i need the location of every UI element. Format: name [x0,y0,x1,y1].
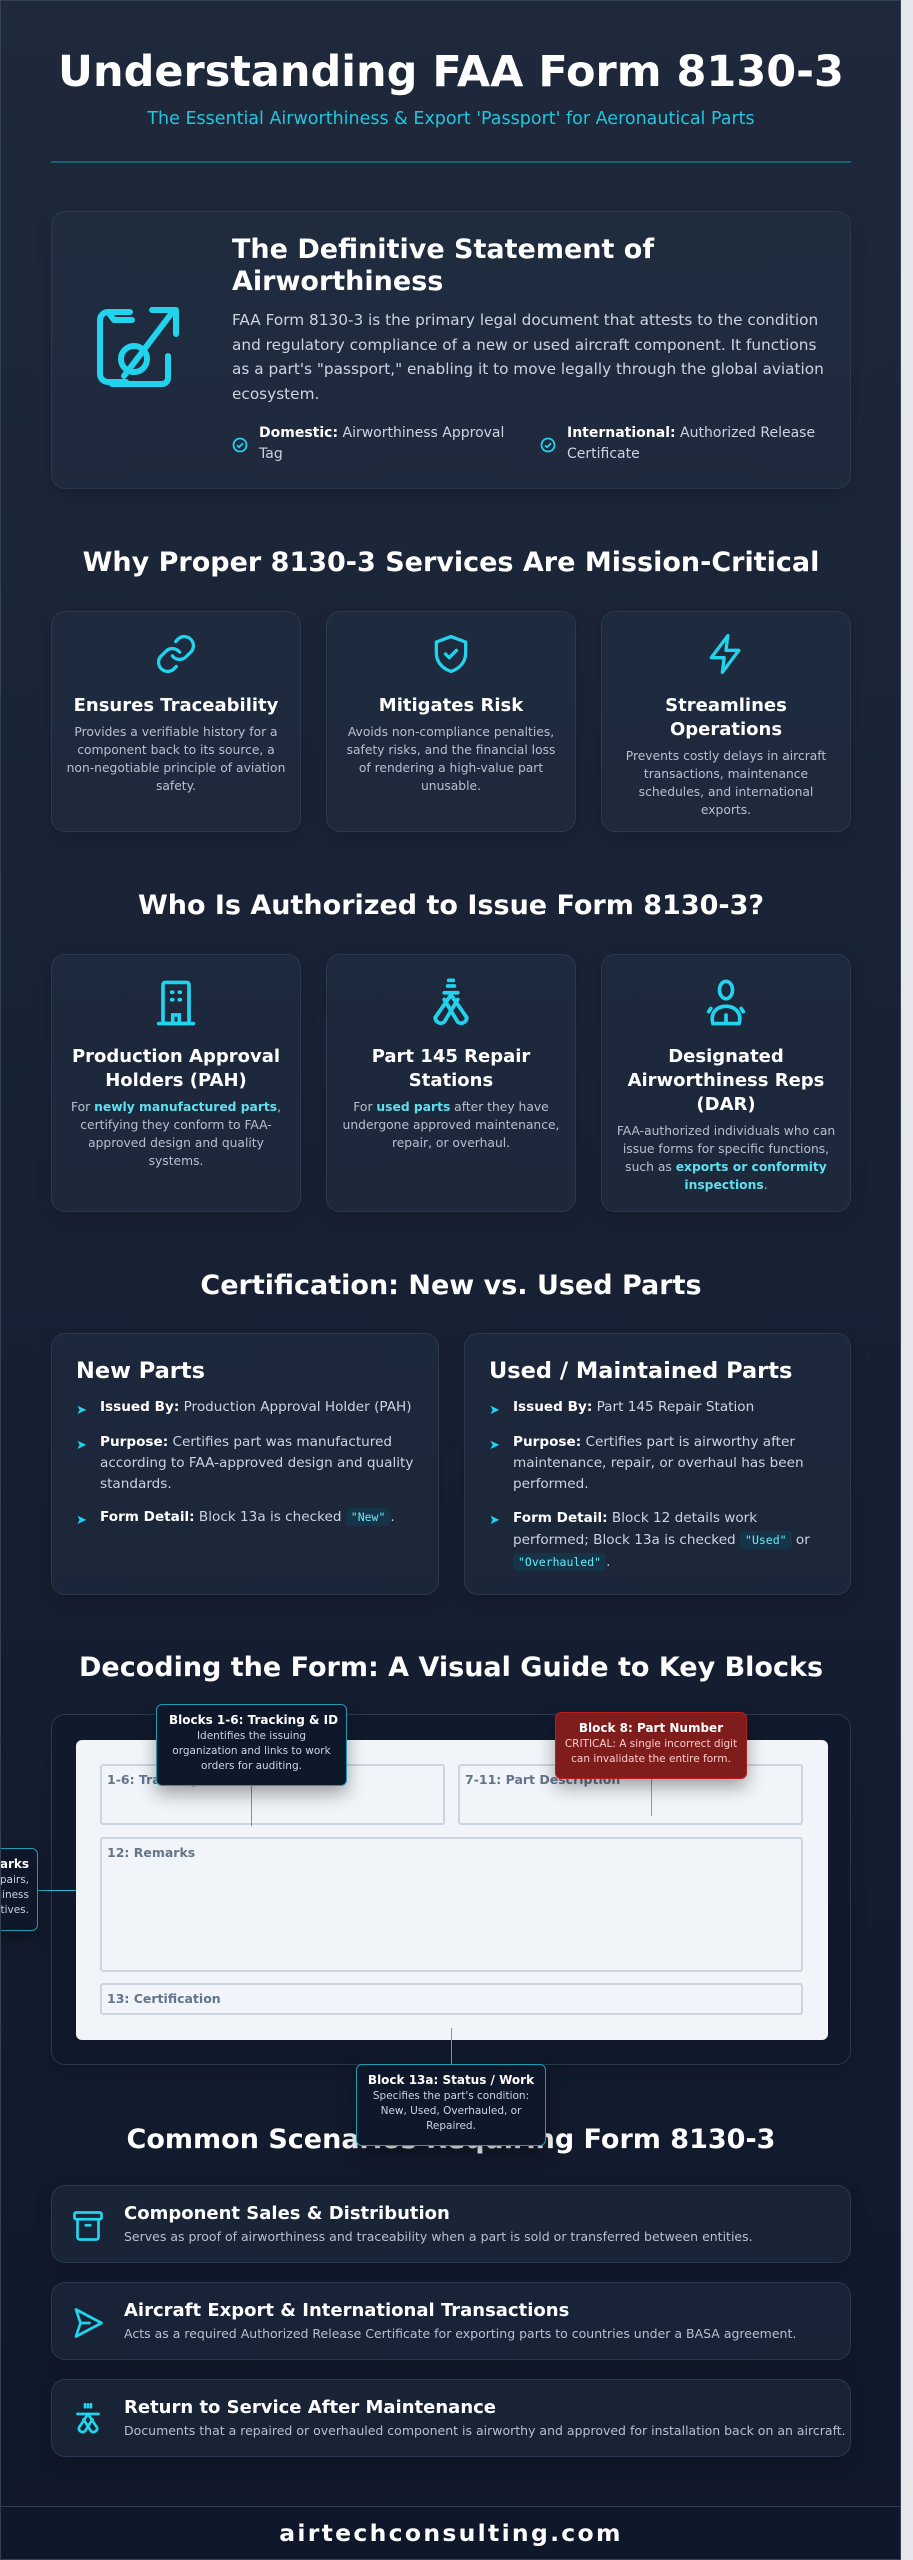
panel: scenario return to service: Return to Service After Maintenance [124,2397,496,2418]
panel: new parts [51,1333,439,1595]
heading: scenarios: Common Scenarios Requiring Form 8130-3 [127,2124,775,2155]
callout: block 8: CRITICAL: A single incorrect digit can invalidate the entire form. [565,1738,737,1765]
panel: used parts: Used / Maintained Parts [489,1358,792,1384]
panel: DAR [601,954,851,1212]
footer [1,2506,901,2560]
panel: used parts [464,1333,851,1595]
panel: operations: Prevents costly delays in aircraft transactions, maintenance schedules, and international exports. [626,749,826,817]
panel: risk: Mitigates Risk [379,695,523,716]
subtitle: The Essential Airworthiness & Export 'Passport' for Aeronautical Parts [147,109,755,129]
callout: block 13a: Block 13a: Status / Work [368,2073,534,2087]
panel: definitive statement [51,211,851,489]
panel: operations: Operations [670,719,782,740]
bullet: issued: Issued By: Production Approval Holder (PAH) [100,1399,412,1415]
icon: person [706,980,746,1026]
panel: traceability [51,611,301,832]
bullet: purpose: ➤ [489,1438,500,1453]
panel: operations [601,611,851,832]
icon: tools [433,978,469,1026]
panel: scenario export [51,2282,851,2360]
icon: bolt [710,634,741,674]
callout: block 8: Block 8: Part Number [579,1721,723,1735]
heading: decoding: Decoding the Form: A Visual Guide to Key Blocks [79,1652,823,1683]
form sheet: 1-6: Tracking [107,1772,199,1787]
icon: box [73,2211,103,2241]
panel: operations: Streamlines [665,695,787,716]
bullet: form detail: ➤ [489,1513,500,1528]
bullet: purpose: ➤ [76,1438,87,1453]
callout: block 12 remarks [0,1848,38,1931]
heading: why: Why Proper 8130-3 Services Are Mission-Critical [83,547,819,578]
callout: blocks 1-6: Blocks 1-6: Tracking & ID [169,1713,338,1727]
panel: part 145: Part 145 Repair Stations [372,1046,530,1091]
heading: The Definitive Statement of Airworthiness [232,234,654,297]
panel: scenario sales [51,2185,851,2263]
panel: PAH: Production Approval Holders (PAH) [72,1046,280,1091]
panel: DAR: FAA-authorized individuals who can issue forms for specific functions, such as exports or conformity inspections. [617,1124,835,1192]
footer: airtechconsulting.com [279,2519,623,2547]
callout: blocks 1-6: Identifies the issuing organization and links to work orders for auditing. [172,1730,331,1772]
form sheet: 12: Remarks [107,1845,195,1860]
bullet: form detail: ➤ [76,1513,87,1528]
form sheet: 7-11: Part Description [465,1772,620,1787]
panel: risk [326,611,576,832]
bullet: purpose: Purpose: Certifies part is airworthy after maintenance, repair, or overhaul has been performed. [513,1434,804,1492]
bullet: domestic: Domestic: Airworthiness Approval Tag [259,425,504,462]
panel: scenario sales: Component Sales & Distribution [124,2203,450,2224]
icon: shield [434,634,468,674]
bullet: purpose: Purpose: Certifies part was manufactured according to FAA-approved design and quality standards. [100,1434,413,1492]
panel: risk: Avoids non-compliance penalties, safety risks, and the financial loss of rendering a high-value part unusable. [347,725,555,793]
panel: scenario export: Aircraft Export & International Transactions [124,2300,569,2321]
bullet: international: International: Authorized Release Certificate [567,425,815,462]
title: Understanding FAA Form 8130-3 [58,47,844,97]
panel: DAR: Designated Airworthiness Reps (DAR) [628,1046,824,1115]
heading: who: Who Is Authorized to Issue Form 8130-3? [138,890,764,921]
panel: part 145: For used parts after they have undergone approved maintenance, repair, or overhaul. [343,1100,559,1150]
callout: blocks 1-6 [156,1704,347,1786]
form sheet [76,1740,828,2040]
form sheet: 13: Certification [107,1991,221,2006]
bullet: issued: ➤ [489,1403,500,1418]
panel: scenario return to service: Documents that a repaired or overhauled component is airworthy and approved for installation back on an aircraft. [124,2423,846,2438]
panel: scenario export: Acts as a required Authorized Release Certificate for exporting parts to countries under a BASA agreement. [124,2326,796,2341]
panel: scenario return to service [51,2379,851,2457]
icon: send [74,2308,103,2338]
bullet: issued: Issued By: Part 145 Repair Station [513,1399,754,1415]
panel: traceability: Provides a verifiable history for a component back to its source, a non-negotiable principle of aviation safety. [67,725,285,793]
bullet: form detail: Form Detail: Block 13a is checked "New" . [100,1509,395,1525]
callout: block 13a: Specifies the part's condition: New, Used, Overhauled, or Repaired. [373,2090,529,2132]
panel: PAH [51,954,301,1212]
callout: block 13a [356,2064,546,2146]
icon: folder with arrow [97,307,179,387]
bullet: issued: ➤ [76,1403,87,1418]
callout: block 8 [555,1712,747,1779]
icon: building [156,980,196,1026]
panel: part 145 [326,954,576,1212]
panel: new parts: New Parts [76,1358,205,1384]
panel: PAH: For newly manufactured parts, certifying they conform to FAA-approved design and quality systems. [71,1100,281,1168]
heading: certification: Certification: New vs. Used Parts [200,1270,702,1301]
icon: tools [76,2402,100,2434]
panel: traceability: Ensures Traceability [74,695,278,716]
paragraph: FAA Form 8130-3 is the primary legal document that attests to the condition and regulatory compliance of a new or used aircraft component. It functions as a part's "passport," enabling it to move legally through the global aviation ecosystem. [232,311,824,402]
bullet: form detail: Form Detail: Block 12 details work performed; Block 13a is checked "Used" or "Overhauled" . [513,1510,810,1570]
panel: form diagram [51,1714,851,2065]
icon: link [156,634,196,674]
panel: scenario sales: Serves as proof of airworthiness and traceability when a part is sold or transferred between entities. [124,2229,753,2244]
